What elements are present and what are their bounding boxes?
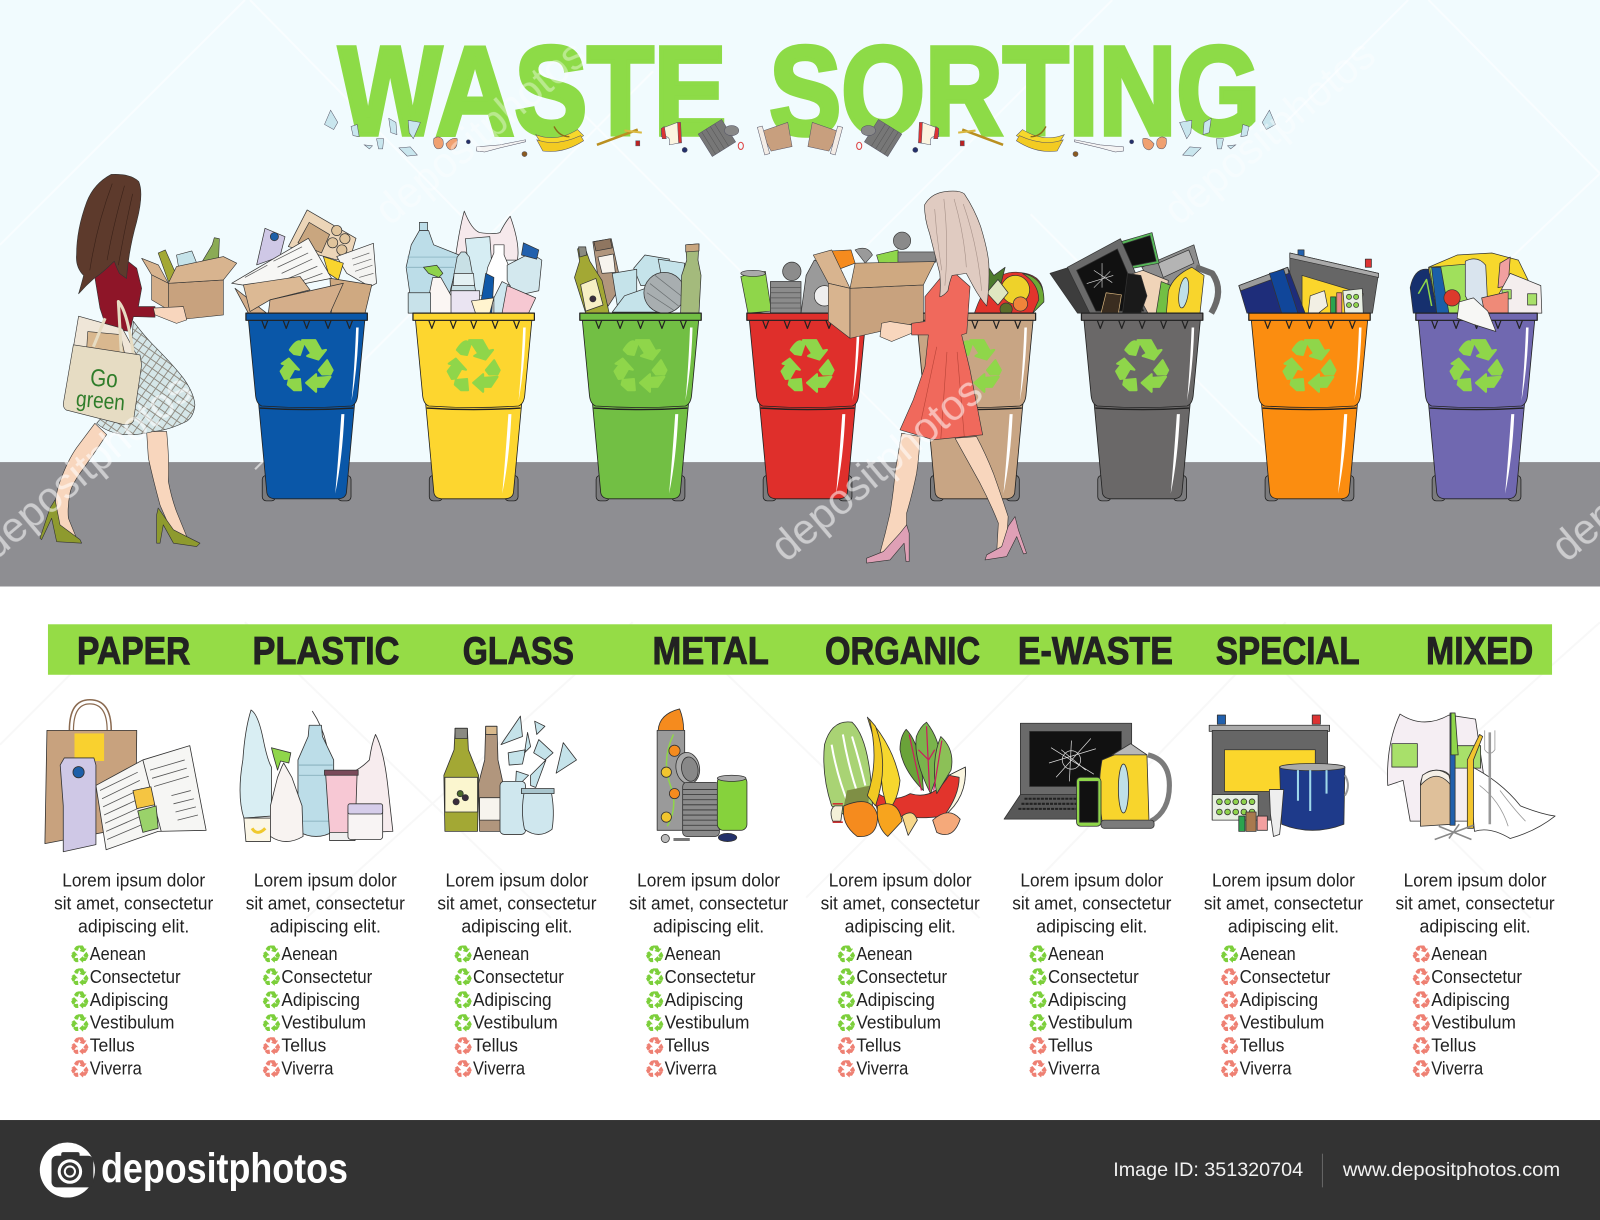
left shoe	[40, 500, 82, 543]
description: Lorem ipsum dolor	[829, 869, 972, 890]
checklist: Aenean	[1048, 943, 1104, 964]
column: glass	[437, 869, 597, 1079]
checklist: Adipiscing	[281, 989, 360, 1010]
column: e-waste	[1012, 869, 1171, 1079]
checklist: Tellus	[665, 1035, 710, 1056]
checklist: Tellus	[856, 1035, 901, 1056]
bin: plastic	[406, 211, 542, 501]
tote bag: Go	[89, 365, 119, 393]
right shoe	[157, 508, 200, 547]
blonde hair	[924, 191, 989, 306]
icon: special waste items	[1209, 715, 1348, 836]
checklist: Adipiscing	[1048, 989, 1127, 1010]
checklist: Vestibulum	[856, 1012, 941, 1033]
tote bag	[63, 345, 142, 425]
checklist: Aenean	[1240, 943, 1296, 964]
checklist	[72, 943, 181, 1079]
checklist: Vestibulum	[473, 1012, 558, 1033]
description: adipiscing elit.	[1036, 915, 1147, 936]
checklist: Vestibulum	[281, 1012, 366, 1033]
back leg	[55, 423, 107, 538]
checklist: Consectetur	[665, 966, 756, 987]
image id: Image ID: 351320704	[1113, 1159, 1303, 1181]
bin: mixed	[1410, 253, 1542, 501]
heap: mixed waste	[1410, 253, 1542, 313]
checklist: Vestibulum	[90, 1012, 174, 1033]
lower section background	[0, 587, 1600, 1120]
carried box of glass	[142, 238, 237, 319]
column: mixed	[1396, 869, 1555, 1079]
hand	[880, 322, 912, 342]
description: adipiscing elit.	[1419, 915, 1531, 936]
description	[821, 869, 980, 936]
description: Lorem ipsum dolor	[637, 869, 780, 890]
website: www.depositphotos.com	[1342, 1159, 1560, 1181]
watermarks: depositphotos	[365, 30, 596, 234]
description: sit amet, consectetur	[437, 892, 597, 913]
description: adipiscing elit.	[845, 915, 956, 936]
description: adipiscing elit.	[1228, 915, 1339, 936]
description: sit amet, consectetur	[821, 892, 980, 913]
description: Lorem ipsum dolor	[446, 869, 588, 890]
checklist: Adipiscing	[473, 989, 552, 1010]
column: organic	[821, 869, 980, 1079]
bin: glass	[574, 239, 701, 501]
checklist: Aenean	[1431, 943, 1487, 964]
checklist: Aenean	[281, 943, 338, 964]
checklist: Viverra	[473, 1058, 526, 1079]
checklist: Viverra	[856, 1058, 909, 1079]
checklist: Consectetur	[1048, 966, 1139, 987]
net bag	[97, 321, 195, 435]
description: sit amet, consectetur	[246, 892, 405, 913]
checklist: Consectetur	[856, 966, 947, 987]
checklist: Aenean	[665, 943, 721, 964]
checklist: Viverra	[665, 1058, 717, 1079]
checklist: Vestibulum	[665, 1012, 749, 1033]
description	[437, 869, 597, 936]
coral dress	[900, 273, 983, 440]
bin: organic	[914, 263, 1044, 501]
description: Lorem ipsum dolor	[1212, 869, 1355, 890]
description	[54, 869, 213, 936]
checklist: Tellus	[473, 1035, 518, 1056]
description	[1396, 869, 1555, 936]
checklist: Adipiscing	[1431, 989, 1510, 1010]
footer bar	[0, 1120, 1600, 1220]
checklist: Viverra	[1048, 1058, 1101, 1079]
label: organic: ORGANIC	[825, 630, 980, 673]
bin: special	[1239, 250, 1379, 501]
checklist: Aenean	[856, 943, 912, 964]
category header band	[48, 624, 1552, 675]
footer logo	[40, 1142, 348, 1198]
checklist: Consectetur	[473, 966, 564, 987]
label: e-waste: E-WASTE	[1018, 630, 1173, 673]
heap: organic waste	[974, 263, 1044, 315]
heap: paper waste	[232, 210, 377, 313]
description: adipiscing elit.	[653, 915, 764, 936]
title	[339, 20, 1260, 162]
description	[629, 869, 788, 936]
checklist: Consectetur	[90, 966, 181, 987]
label: mixed: MIXED	[1426, 630, 1533, 673]
description: sit amet, consectetur	[629, 892, 788, 913]
watermarks	[0, 30, 1600, 571]
bin: paper	[232, 210, 377, 501]
rag hanging over the lid	[1457, 298, 1496, 332]
column: special	[1204, 869, 1363, 1079]
litter beneath title	[324, 110, 1276, 157]
checklist: Viverra	[1431, 1058, 1484, 1079]
description	[1204, 869, 1363, 936]
description: sit amet, consectetur	[1204, 892, 1363, 913]
checklist: Viverra	[1240, 1058, 1292, 1079]
description: sit amet, consectetur	[1396, 892, 1555, 913]
tote bag: green	[75, 386, 126, 415]
right pink shoe	[985, 517, 1027, 560]
description: adipiscing elit.	[461, 915, 573, 936]
checklist: Consectetur	[281, 966, 372, 987]
checklist: Viverra	[281, 1058, 334, 1079]
checklist: Aenean	[473, 943, 529, 964]
figure: woman in coral dress	[813, 191, 1027, 563]
title: WASTE	[339, 20, 727, 162]
checklist	[646, 943, 756, 1079]
icon: glass items	[444, 716, 577, 834]
label: metal: METAL	[653, 630, 769, 673]
description: Lorem ipsum dolor	[1404, 869, 1547, 890]
checklist: Viverra	[90, 1058, 143, 1079]
checklist: Vestibulum	[1048, 1012, 1133, 1033]
icon: paper items	[45, 700, 206, 852]
checklist: Tellus	[1048, 1035, 1093, 1056]
icon: e-waste items	[1004, 723, 1169, 828]
title: SORTING	[769, 20, 1260, 162]
left pink shoe	[867, 525, 909, 563]
figure: woman with go green bags	[40, 174, 237, 547]
label: paper: PAPER	[77, 630, 190, 673]
footer logo: depositphotos	[101, 1144, 348, 1191]
description: Lorem ipsum dolor	[62, 869, 205, 890]
heap: plastic waste	[406, 211, 542, 313]
column: paper	[54, 869, 213, 1079]
bin: metal	[741, 260, 868, 501]
tote contents	[73, 316, 138, 357]
column: metal	[629, 869, 788, 1079]
checklist: Adipiscing	[90, 989, 168, 1010]
checklist: Consectetur	[1431, 966, 1522, 987]
description: Lorem ipsum dolor	[254, 869, 397, 890]
heap: special waste	[1239, 250, 1379, 313]
tote handles	[93, 302, 134, 357]
heap: glass waste	[574, 239, 701, 313]
hair strands	[90, 184, 133, 270]
label: glass: GLASS	[463, 630, 574, 673]
hero background	[0, 0, 1600, 463]
checklist	[1413, 943, 1522, 1079]
checklist: Adipiscing	[665, 989, 743, 1010]
description	[1012, 869, 1171, 936]
checklist: Aenean	[90, 943, 146, 964]
right leg	[955, 437, 1008, 552]
checklist: Vestibulum	[1431, 1012, 1516, 1033]
ground strip	[0, 462, 1600, 587]
column: plastic	[246, 869, 405, 1079]
checklist	[1030, 943, 1139, 1079]
watermarks: depositphotos	[761, 367, 991, 571]
dress folds	[918, 347, 964, 439]
icon: metal items	[657, 709, 747, 843]
hair strands	[935, 199, 982, 291]
red top	[95, 255, 155, 332]
checklist	[263, 943, 372, 1079]
icon: mixed waste items	[1388, 713, 1555, 840]
checklist	[455, 943, 564, 1079]
checklist: Tellus	[1431, 1035, 1476, 1056]
description	[246, 869, 405, 936]
bin: e-waste	[1050, 233, 1218, 501]
description: sit amet, consectetur	[1012, 892, 1171, 913]
carried box of metal	[813, 232, 936, 338]
label: plastic: PLASTIC	[253, 630, 399, 673]
description: adipiscing elit.	[270, 915, 381, 936]
hair	[76, 174, 141, 294]
checklist: Adipiscing	[1240, 989, 1318, 1010]
checklist: Tellus	[90, 1035, 135, 1056]
description: sit amet, consectetur	[54, 892, 213, 913]
front leg	[147, 431, 187, 537]
icon: organic items	[824, 717, 965, 837]
hand	[153, 307, 187, 323]
checklist: Tellus	[281, 1035, 326, 1056]
left leg	[880, 433, 920, 557]
icon: plastic items	[240, 710, 393, 842]
description: Lorem ipsum dolor	[1020, 869, 1163, 890]
heap: e-waste	[1050, 233, 1218, 313]
label: special: SPECIAL	[1216, 630, 1360, 673]
checklist: Tellus	[1240, 1035, 1284, 1056]
checklist	[838, 943, 947, 1079]
description: adipiscing elit.	[78, 915, 189, 936]
heap: metal waste	[741, 260, 843, 313]
watermarks: depositphotos	[1154, 30, 1384, 234]
checklist: Vestibulum	[1240, 1012, 1324, 1033]
checklist	[1221, 943, 1330, 1079]
checklist: Consectetur	[1240, 966, 1330, 987]
checklist: Adipiscing	[856, 989, 935, 1010]
